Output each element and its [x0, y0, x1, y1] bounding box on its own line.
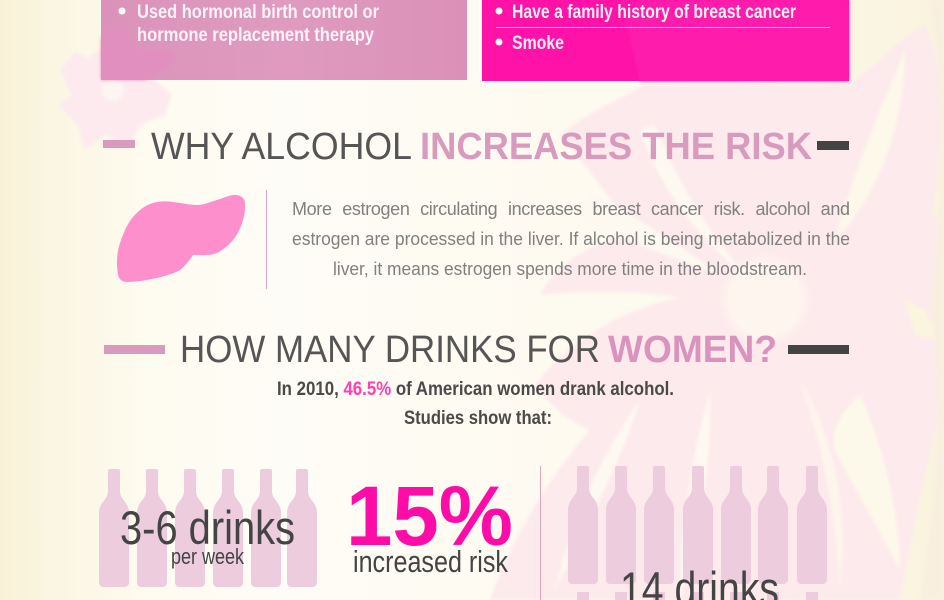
stat: 15 percent increased risk: 15% [346, 469, 513, 563]
text block: why alcohol explanation: liver, it means estrogen spends more time in the bloodstream. [333, 259, 807, 279]
bullet: smoke: Smoke [512, 33, 564, 54]
panel: magenta risk box [482, 0, 849, 81]
bullet: family history: Have a family history of breast cancer [512, 2, 796, 23]
stat: 15 percent increased risk: increased risk [353, 544, 508, 579]
text block: why alcohol explanation: estrogen are processed in the liver. If alcohol is being metabolized in the [292, 229, 850, 249]
text block: why alcohol explanation [292, 199, 850, 279]
bullet: hormonal birth control: hormone replacement therapy [137, 25, 374, 46]
bullet: hormonal birth control: Used hormonal birth control or [137, 2, 380, 23]
heading: how many drinks for women: HOW MANY DRINKS FOR [180, 329, 600, 371]
cream streaks [838, 57, 904, 235]
heading: how many drinks for women: WOMEN? [608, 329, 777, 371]
panel: 3-6 drinks: 3-6 drinks [120, 501, 295, 554]
panel: 3-6 drinks: per week [171, 544, 245, 569]
text block: studies show: Studies show that: [404, 408, 552, 429]
heading: why alcohol increases the risk: WHY ALCOHOL [151, 126, 412, 168]
bullet: hormonal birth control [118, 2, 380, 46]
text block: why alcohol explanation: More estrogen circulating increases breast cancer risk. alcohol and [292, 199, 850, 219]
bullet: smoke [496, 33, 564, 54]
text block: 2010 statistic: In 2010, 46.5% of American women drank alcohol. [277, 379, 674, 400]
icon: liver [117, 195, 245, 282]
panel: 14 drinks [568, 466, 827, 600]
heading: why alcohol increases the risk [103, 126, 849, 168]
panel: 3-6 drinks [99, 469, 317, 587]
heading: why alcohol increases the risk: INCREASES THE RISK [420, 126, 813, 168]
icon: six bottles [99, 469, 317, 587]
large background flower [490, 0, 944, 600]
small background flower [58, 45, 172, 150]
panel: pink risk box [101, 0, 467, 80]
flower centre [713, 248, 817, 352]
icon: fourteen bottles [568, 466, 827, 600]
heading: how many drinks for women [104, 329, 849, 371]
